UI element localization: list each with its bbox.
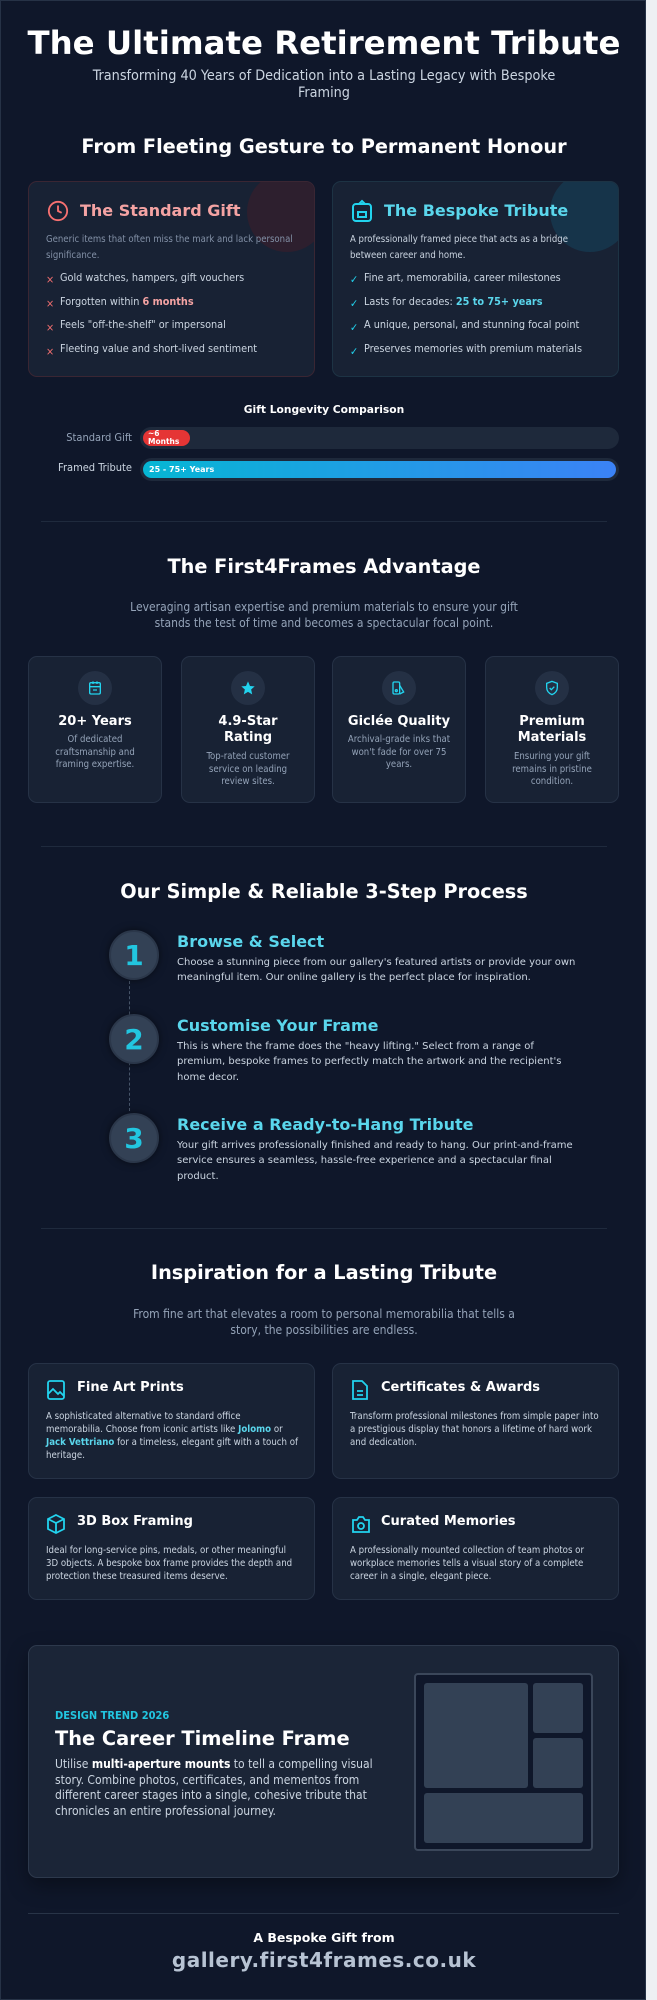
step 1: Browse & Select [177, 932, 324, 951]
step 1: 1 [124, 938, 144, 972]
icon: shield [535, 671, 569, 705]
icon: document [352, 1380, 368, 1400]
list: bespoke benefits: ✓ [350, 321, 358, 334]
list: standard drawbacks: Fleeting value and short-lived sentiment [60, 342, 257, 355]
list: standard drawbacks: Feels "off-the-shelf" or impersonal [60, 318, 226, 331]
icon: image [47, 1380, 65, 1400]
panel: 20+ years: Of dedicated craftsmanship and framing expertise. [55, 734, 135, 770]
list: bespoke benefits: Lasts for decades: 25 to 75+ years [364, 295, 542, 308]
heading: fleeting to permanent: From Fleeting Gesture to Permanent Honour [81, 135, 567, 158]
panel: 4.9 star: Top-rated customer service on leading review sites. [206, 751, 290, 787]
chart: gift longevity comparison: Framed Tribute [58, 461, 132, 474]
panel: fine art prints: Fine Art Prints [77, 1380, 184, 1395]
list: standard drawbacks: Gold watches, hampers, gift vouchers [60, 271, 244, 284]
panel: standard gift [28, 181, 315, 377]
panel: 20+ years [28, 656, 162, 803]
panel: certificates [332, 1363, 619, 1479]
icon: cube [47, 1514, 65, 1534]
chart: gift longevity comparison: Gift Longevity Comparison [244, 403, 404, 416]
panel: premium materials [485, 656, 619, 803]
step 2: This is where the frame does the "heavy lifting." Select from a range of premium, bespoke frames to perfectly match the artwork and the recipient's home decor. [177, 1041, 561, 1083]
title: The Ultimate Retirement Tribute [27, 24, 620, 62]
list: bespoke benefits [350, 271, 582, 358]
list: bespoke benefits: ✓ [350, 297, 358, 310]
panel: giclee: Archival-grade inks that won't fade for over 75 years. [348, 734, 450, 770]
text: advantage intro: Leveraging artisan expertise and premium materials to ensure your gift stands the test of time and becomes a spectacular focal point. [130, 600, 518, 630]
step 2 [108, 1012, 561, 1083]
panel: 20+ years: 20+ Years [58, 714, 132, 729]
heading: inspiration: Inspiration for a Lasting Tribute [151, 1261, 497, 1284]
list: standard drawbacks: × [46, 297, 54, 310]
step 3 [108, 1110, 573, 1182]
text: bespoke description: A professionally framed piece that acts as a bridge between career and home. [350, 234, 568, 261]
heading: bespoke: The Bespoke Tribute [384, 201, 568, 220]
subtitle: Transforming 40 Years of Dedication into a Lasting Legacy with Bespoke Framing [93, 68, 555, 101]
panel: bespoke tribute [332, 181, 619, 377]
icon: calendar [78, 671, 112, 705]
chart: gift longevity comparison [58, 403, 619, 481]
chart: gift longevity comparison: Months [148, 437, 179, 446]
chart: gift longevity comparison: Standard Gift [66, 431, 132, 444]
panel: 4.9 star: Rating [224, 730, 272, 745]
label: design trend: DESIGN TREND 2026 [55, 1709, 169, 1722]
panel: 3d box framing: 3D Box Framing [77, 1514, 193, 1529]
list: bespoke benefits: Preserves memories with premium materials [364, 342, 582, 355]
text: inspiration intro: From fine art that elevates a room to personal memorabilia that tells a story, the possibilities are endless. [133, 1307, 515, 1337]
chart: gift longevity comparison: ~6 [148, 429, 160, 438]
step 1: Choose a stunning piece from our gallery's featured artists or provide your own meaningful item. Our online gallery is the perfect place for inspiration. [177, 957, 575, 983]
panel: curated memories: Curated Memories [381, 1514, 516, 1529]
heading: standard gift: The Standard Gift [80, 201, 240, 220]
heading: career timeline: The Career Timeline Frame [55, 1727, 350, 1750]
panel: fine art prints: A sophisticated alternative to standard office memorabilia. Choose from iconic artists like Jolomo or Jack Vettriano for a timeless, elegant gift with a touch of heritage. [46, 1411, 298, 1461]
step 1 [108, 929, 575, 984]
step 3: Receive a Ready-to-Hang Tribute [177, 1115, 473, 1134]
panel: premium materials: Premium [519, 714, 585, 729]
list: bespoke benefits: A unique, personal, and stunning focal point [364, 318, 579, 331]
heading: advantage: The First4Frames Advantage [167, 555, 481, 578]
panel: career timeline frame [28, 1645, 619, 1878]
panel: curated memories [332, 1497, 619, 1600]
panel: curated memories: A professionally mounted collection of team photos or workplace memories tells a visual story of a complete career in a single, elegant piece. [350, 1545, 584, 1582]
list: bespoke benefits: ✓ [350, 345, 358, 358]
panel: certificates: Certificates & Awards [381, 1380, 540, 1395]
chart: gift longevity comparison: 25 - 75+ Years [149, 465, 214, 474]
panel: premium materials: Materials [518, 730, 586, 745]
text: timeline description: Utilise multi-aperture mounts to tell a compelling visual story. Combine photos, certificates, and mementos from different career stages into a single, cohesive tribute that chronicles an entire professional journey. [55, 1757, 373, 1818]
icon: star [231, 671, 265, 705]
panel: premium materials: Ensuring your gift remains in pristine condition. [512, 751, 592, 787]
step 3: 3 [124, 1122, 144, 1154]
panel: giclee: Giclée Quality [348, 714, 450, 729]
list: standard drawbacks: × [46, 321, 54, 334]
list: standard drawbacks: × [46, 345, 54, 358]
icon: camera [352, 1516, 370, 1533]
step 2: 2 [124, 1022, 144, 1056]
panel: 3d box framing: Ideal for long-service pins, medals, or other meaningful 3D objects. A bespoke box frame provides the depth and protection these treasured items deserve. [46, 1545, 292, 1582]
list: bespoke benefits: ✓ [350, 273, 358, 286]
text: standard description: Generic items that often miss the mark and lack personal significance. [46, 234, 293, 261]
panel: 4.9 star [181, 656, 315, 803]
heading: process: Our Simple & Reliable 3-Step Process [120, 880, 528, 903]
list: standard drawbacks: × [46, 273, 54, 286]
icon: frame [352, 200, 372, 222]
footer: gallery.first4frames.co.uk [172, 1948, 476, 1972]
panel: fine art prints [28, 1363, 315, 1479]
panel: 4.9 star: 4.9-Star [218, 714, 278, 729]
list: standard drawbacks [46, 271, 257, 358]
icon: ink [382, 671, 416, 705]
panel: giclee [332, 656, 466, 803]
icon: clock [48, 200, 68, 222]
step 2: Customise Your Frame [177, 1016, 378, 1035]
panel: certificates: Transform professional milestones from simple paper into a prestigious display that honors a lifetime of hard work and dedication. [350, 1411, 599, 1448]
panel: 3d box framing [28, 1497, 315, 1600]
footer [172, 1930, 476, 1972]
list: standard drawbacks: Forgotten within 6 months [60, 295, 194, 308]
list: bespoke benefits: Fine art, memorabilia, career milestones [364, 271, 561, 284]
connector line [129, 981, 130, 1111]
footer: A Bespoke Gift from [253, 1930, 395, 1945]
graphic: multi-aperture frame [414, 1673, 593, 1851]
step 3: Your gift arrives professionally finished and ready to hang. Our print-and-frame service ensures a seamless, hassle-free experience and a spectacular final product. [177, 1140, 573, 1182]
